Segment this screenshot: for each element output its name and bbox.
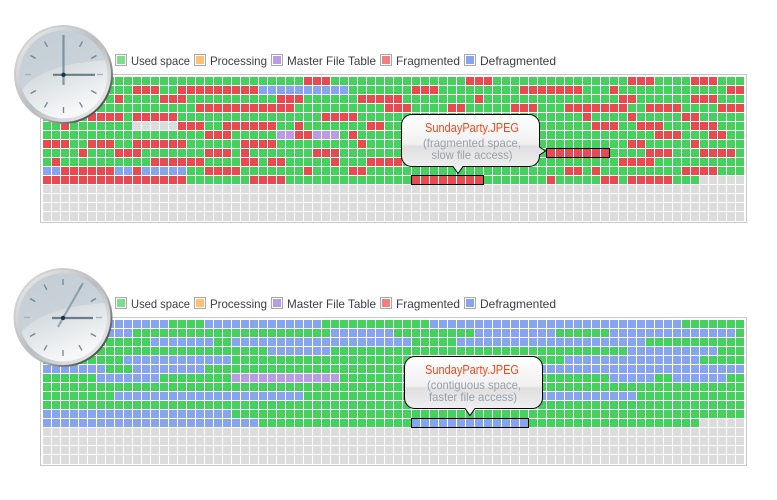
callout line 2: faster file access) bbox=[429, 390, 517, 404]
selected fragment: right piece bbox=[546, 148, 610, 158]
legend swatch: defragmented bbox=[464, 54, 476, 66]
defragmented cells bbox=[43, 86, 349, 176]
legend label: master file table: Master File Table bbox=[287, 297, 376, 311]
legend label: defragmented: Defragmented bbox=[480, 54, 556, 68]
defragmented cells bbox=[43, 320, 745, 428]
legend label: defragmented: Defragmented bbox=[480, 297, 556, 311]
callout: fragmented file bbox=[402, 114, 546, 174]
legend swatch: fragmented bbox=[380, 298, 392, 308]
panel: fragmented disk map bbox=[40, 74, 746, 222]
legend label: used space: Used space bbox=[131, 54, 190, 68]
empty space cells bbox=[43, 320, 745, 464]
selected fragment: bottom row bbox=[412, 176, 484, 184]
callout line 1: (fragmented space, bbox=[423, 136, 521, 150]
legend swatch: master file table bbox=[272, 54, 282, 66]
callout line 2: slow file access) bbox=[432, 148, 513, 162]
legend swatch: used space bbox=[116, 298, 126, 308]
icon: clock, bottom bbox=[14, 268, 112, 367]
legend swatch: used space bbox=[116, 54, 126, 66]
fragmented cells bbox=[43, 77, 745, 185]
cell grid lines bbox=[43, 77, 745, 221]
callout title: SundayParty.JPEG bbox=[425, 362, 519, 377]
callout title: SundayParty.JPEG bbox=[425, 120, 519, 135]
legend: top bbox=[116, 54, 556, 68]
legend swatch: defragmented bbox=[464, 298, 476, 308]
legend label: used space: Used space bbox=[131, 297, 190, 311]
empty space cells bbox=[43, 77, 745, 221]
legend swatch: processing bbox=[194, 54, 206, 66]
callout line 1: (contiguous space, bbox=[427, 378, 521, 392]
icon: clock, top bbox=[14, 25, 113, 124]
selected contiguous file bbox=[412, 418, 528, 428]
legend swatch: processing bbox=[194, 298, 206, 308]
legend label: fragmented: Fragmented bbox=[396, 54, 460, 68]
legend: bottom bbox=[116, 297, 556, 311]
panel border bbox=[40, 74, 746, 222]
used space cells bbox=[43, 320, 745, 428]
callout bubble with two pointers bbox=[402, 114, 546, 174]
master file table cells bbox=[277, 131, 340, 140]
panel border bbox=[40, 318, 746, 466]
unused gap cells bbox=[133, 122, 178, 131]
master file table cells bbox=[232, 374, 340, 383]
legend label: fragmented: Fragmented bbox=[396, 297, 460, 311]
cell grid lines bbox=[43, 320, 745, 464]
panel: defragmented disk map bbox=[40, 318, 746, 466]
callout: contiguous file bbox=[404, 356, 542, 416]
legend label: processing: Processing bbox=[210, 54, 267, 68]
legend label: master file table: Master File Table bbox=[287, 54, 376, 68]
legend swatch: fragmented bbox=[380, 54, 392, 66]
legend swatch: master file table bbox=[272, 298, 282, 308]
legend label: processing: Processing bbox=[210, 297, 267, 311]
callout bubble with pointer bbox=[404, 356, 542, 416]
used space cells bbox=[43, 77, 745, 185]
